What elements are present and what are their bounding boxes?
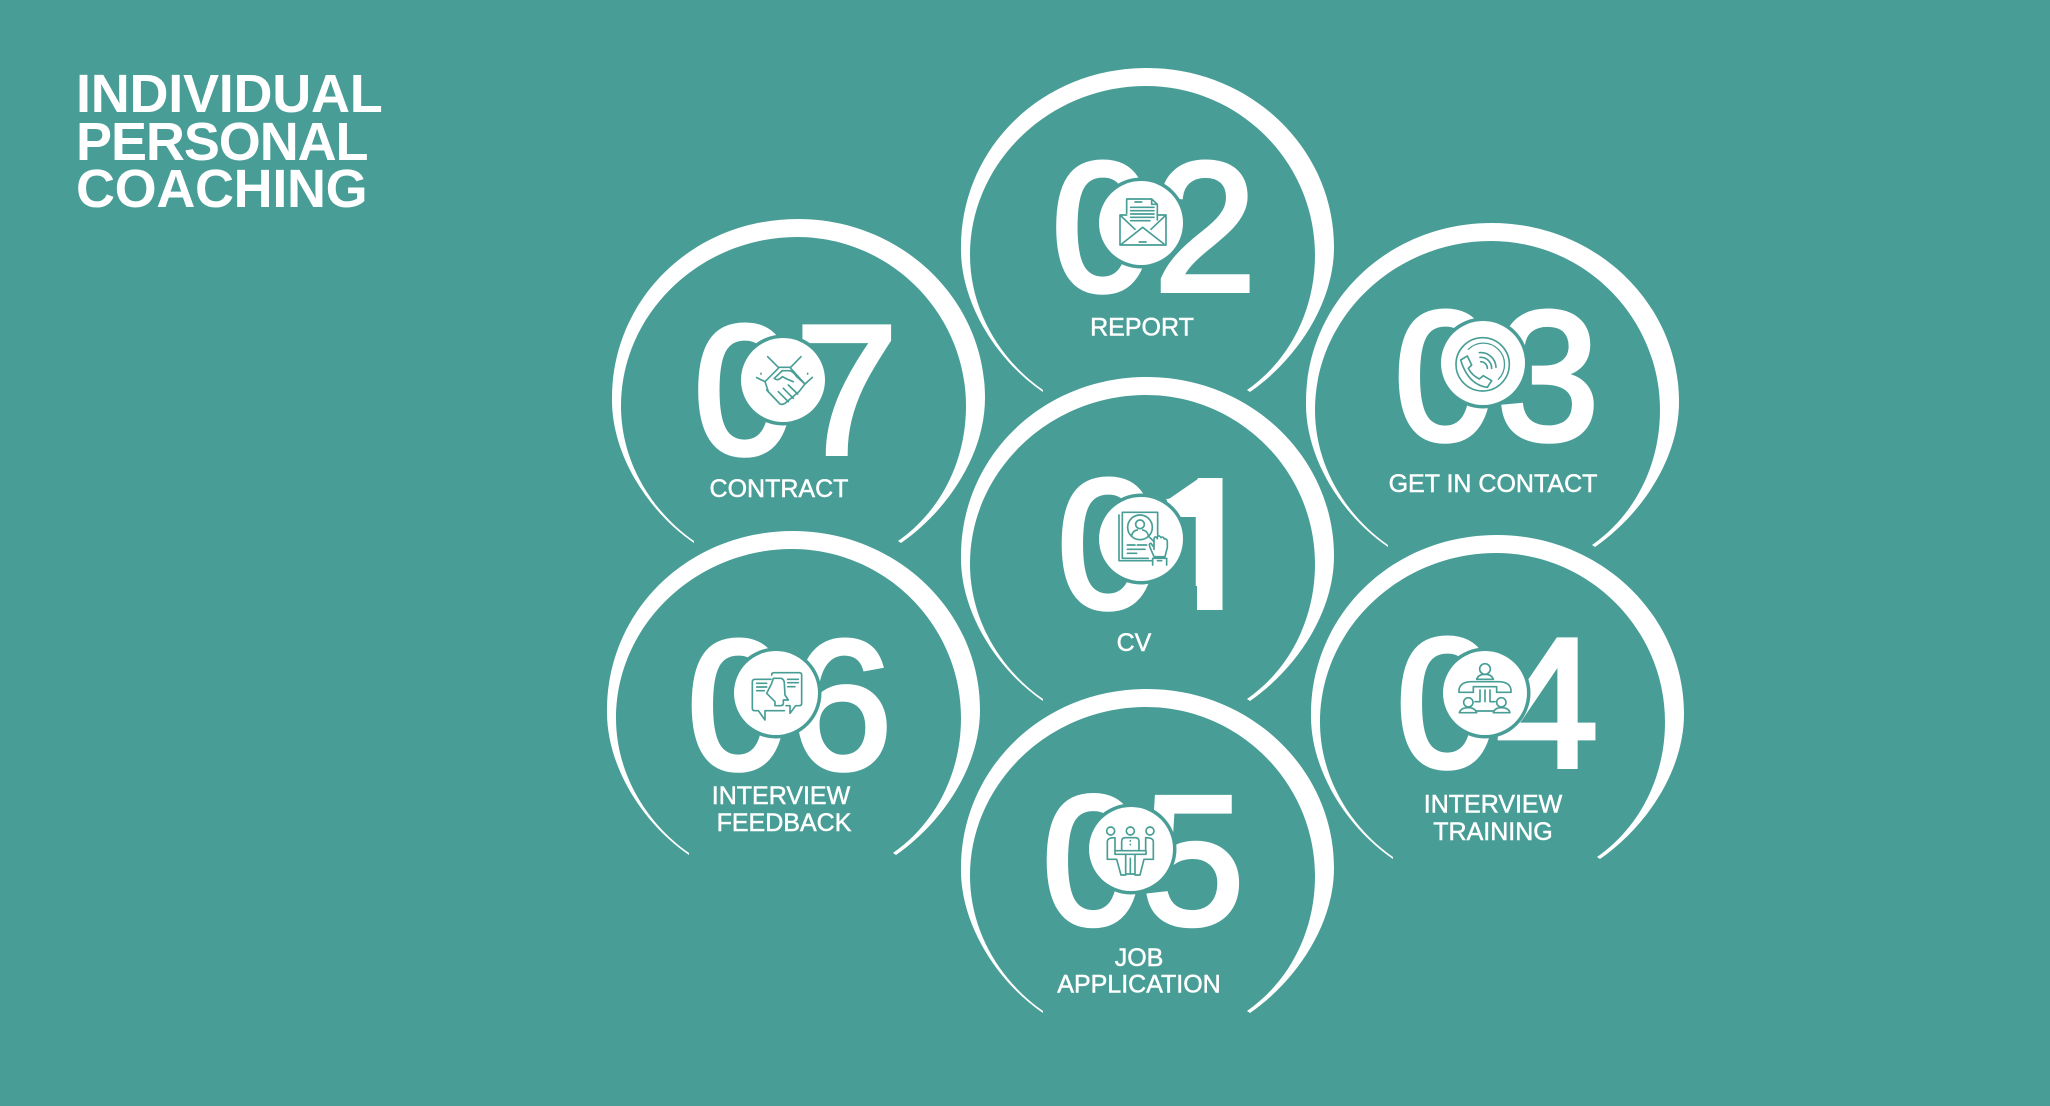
number 04: 4 bbox=[1496, 600, 1598, 806]
label: interview training: TRAINING bbox=[1433, 818, 1553, 846]
label: cv: CV bbox=[1117, 629, 1152, 657]
icon: envelope with document bbox=[1096, 178, 1186, 268]
number 06: 0 bbox=[687, 602, 789, 808]
number 03: 3 bbox=[1497, 272, 1599, 478]
crescent ring 01 bbox=[961, 377, 1334, 701]
number 07: 7 bbox=[796, 286, 898, 492]
label: job application bbox=[1057, 944, 1221, 998]
crescent ring 04 bbox=[1311, 535, 1684, 859]
icon: phone bbox=[1438, 318, 1528, 408]
label: interview feedback: FEEDBACK bbox=[717, 809, 852, 837]
title bbox=[76, 64, 382, 219]
icon: speech bubbles with face bbox=[730, 648, 822, 738]
title: INDIVIDUAL bbox=[76, 64, 382, 124]
title: PERSONAL bbox=[76, 112, 368, 172]
panel: step 06 interview feedback bbox=[607, 531, 980, 855]
label: interview training: INTERVIEW bbox=[1424, 790, 1563, 818]
icon: handshake bbox=[738, 334, 828, 426]
title: COACHING bbox=[76, 159, 367, 219]
number 01: 1 bbox=[1152, 440, 1254, 646]
number 02: 0 bbox=[1052, 124, 1154, 330]
number 04: 0 bbox=[1396, 600, 1498, 806]
number 03: 0 bbox=[1394, 272, 1496, 478]
label: get in contact: GET IN CONTACT bbox=[1389, 470, 1597, 498]
label: job application: APPLICATION bbox=[1057, 970, 1221, 998]
crescent ring 03 bbox=[1306, 223, 1679, 547]
panel: step 05 job application bbox=[961, 689, 1334, 1013]
number 01 bbox=[1057, 440, 1268, 646]
panel: step 01 cv bbox=[961, 377, 1334, 701]
crescent ring 06 bbox=[607, 531, 980, 855]
number 06: 6 bbox=[790, 602, 892, 808]
number 02: 2 bbox=[1154, 124, 1256, 330]
label: interview feedback: INTERVIEW bbox=[712, 782, 851, 810]
panel: step 02 report bbox=[961, 68, 1334, 392]
number 07: 0 bbox=[694, 286, 796, 492]
icon: interview table bbox=[1440, 648, 1530, 738]
label: interview training bbox=[1424, 790, 1563, 846]
crescent ring 05 bbox=[961, 689, 1334, 1013]
panel: step 04 interview training bbox=[1311, 535, 1684, 859]
crescent ring 07 bbox=[612, 219, 985, 543]
icon: cv with magnifier bbox=[1096, 494, 1186, 584]
icon: people at a table bbox=[1086, 804, 1176, 894]
label: report: REPORT bbox=[1090, 314, 1194, 342]
number 05: 5 bbox=[1142, 757, 1244, 963]
label: contract: CONTRACT bbox=[710, 475, 848, 503]
panel: step 07 contract bbox=[612, 219, 985, 543]
panel: step 03 get in contact bbox=[1306, 223, 1679, 547]
crescent ring 02 bbox=[961, 68, 1334, 392]
label: job application: JOB bbox=[1115, 944, 1163, 972]
number 01: 0 bbox=[1057, 440, 1159, 646]
number 05: 0 bbox=[1042, 757, 1144, 963]
label: interview feedback bbox=[712, 782, 852, 837]
